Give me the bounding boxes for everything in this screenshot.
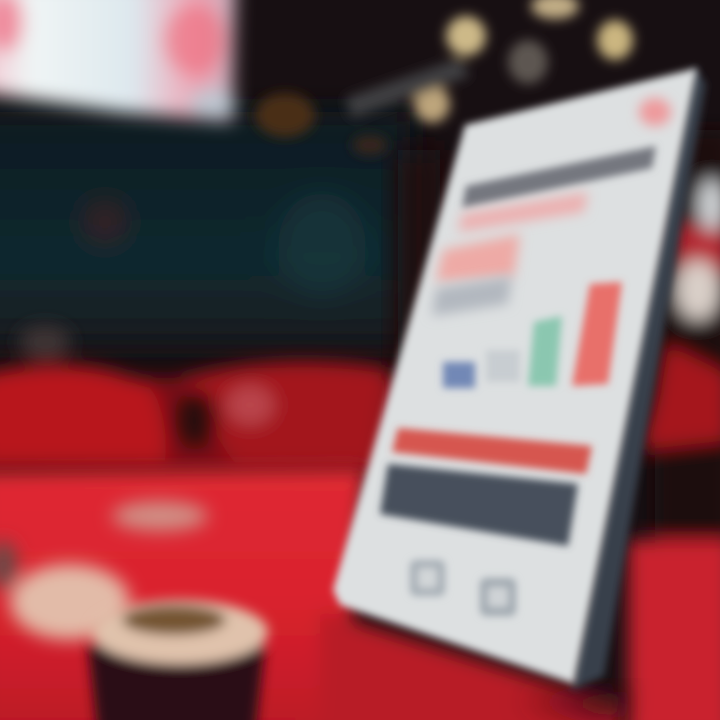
header bar	[462, 146, 656, 208]
dark band	[380, 464, 578, 546]
phone	[333, 66, 706, 720]
cup	[88, 600, 268, 720]
bar chart	[443, 282, 622, 388]
right side background	[628, 130, 720, 720]
icon: right button	[480, 578, 516, 616]
red heading	[458, 192, 588, 232]
ceiling lights	[255, 0, 633, 155]
phone side edge	[572, 66, 706, 690]
napkin: small	[112, 501, 208, 531]
grey text block	[432, 276, 512, 316]
phone shadow	[520, 690, 625, 720]
red floor	[0, 468, 620, 720]
big screen	[0, 0, 236, 122]
phone body	[333, 68, 697, 684]
header icon	[639, 98, 671, 126]
teal wall	[0, 112, 410, 344]
red seats	[0, 326, 400, 474]
red band	[392, 428, 592, 474]
icon: left button	[410, 560, 445, 596]
red subheading	[436, 234, 520, 282]
table items	[0, 501, 208, 640]
dark red wall edge	[398, 150, 440, 370]
napkin: large	[10, 564, 130, 640]
